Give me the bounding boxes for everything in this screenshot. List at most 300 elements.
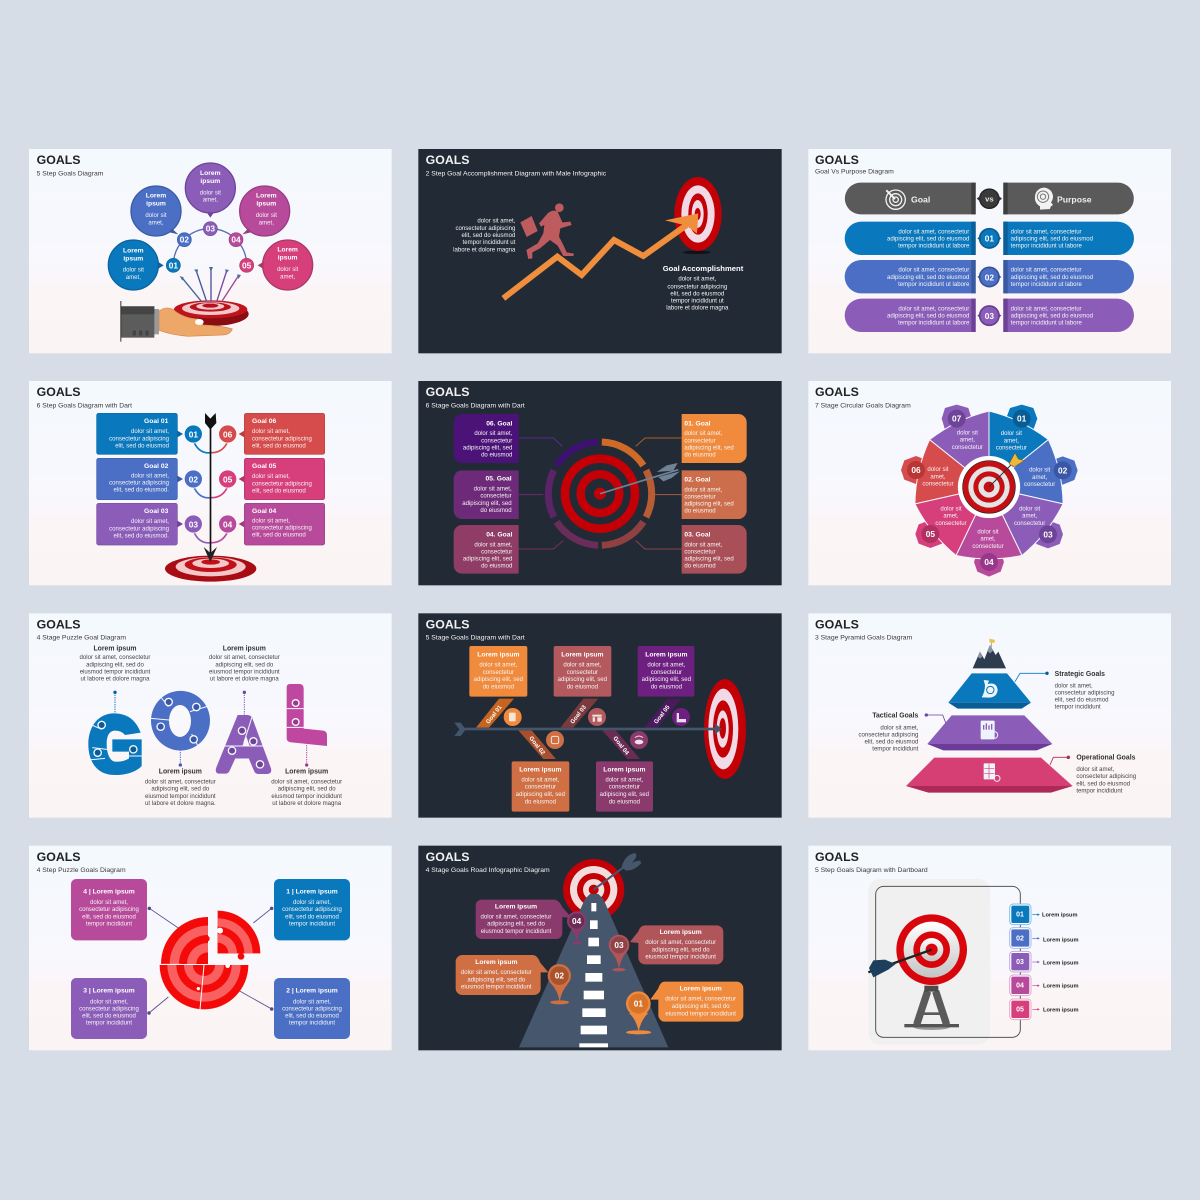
panel background xyxy=(29,149,392,353)
text block 4: eiusmod tempor incididunt xyxy=(271,794,342,800)
goal 05 box: 05. Goal xyxy=(486,476,512,483)
text block 1: dolor sit amet, consectetur xyxy=(80,655,150,661)
wedge text: consectetur xyxy=(1014,521,1045,527)
wedge text: amet, xyxy=(960,438,975,444)
goal 02 box: 02. Goal xyxy=(684,477,711,484)
text block 1: ut labore et dolore magna xyxy=(81,677,150,683)
goal 01 box: do eiusmod xyxy=(684,453,716,459)
panel background xyxy=(808,613,1171,818)
box 2: 2 | Lorem ipsum xyxy=(286,987,338,994)
center target xyxy=(958,453,1024,518)
box: goal 03: dolor sit amet, xyxy=(563,663,602,669)
box: goal 03: Lorem ipsum xyxy=(561,652,603,659)
goal 02 box: elit, sed do eiusmod. xyxy=(114,488,169,494)
item 01 xyxy=(1010,904,1078,925)
goal 02 box: Goal 02 xyxy=(144,463,169,470)
item 04 xyxy=(1010,975,1079,996)
panel: 3 stage pyramid xyxy=(808,613,1171,818)
text: tactical goals xyxy=(858,713,919,753)
bubble 02: dolor sit xyxy=(145,213,167,219)
item 05: Lorem ipsum xyxy=(1043,1008,1079,1014)
text block 2: dolor sit amet, consectetur xyxy=(209,655,280,661)
goal 05 box: elit, sed do eiusmod xyxy=(252,488,306,494)
text: operational goals xyxy=(1076,755,1136,794)
heading xyxy=(815,618,913,642)
goal 01 box xyxy=(682,414,747,463)
box 3: tempor incididunt xyxy=(86,1021,132,1027)
row 03: dolor sit amet, consectetur xyxy=(898,306,969,312)
right text block: labore et dolore magna xyxy=(666,306,729,312)
goal 06 box: adipiscing elit, sed xyxy=(463,445,512,451)
left text block: elit, sed do eiusmod xyxy=(462,233,515,239)
dart xyxy=(868,950,932,977)
goal 03 box: Goal 03 xyxy=(144,508,169,515)
panel background xyxy=(418,149,782,353)
box: goal 02: consectetur xyxy=(525,785,556,791)
goal 06 box: 06. Goal xyxy=(486,421,512,428)
bubble 01: Lorem xyxy=(123,248,144,255)
number badges: 04 xyxy=(223,519,233,529)
goal 04 box: dolor sit amet, xyxy=(252,518,290,524)
text block 3: Lorem ipsum xyxy=(159,769,202,776)
panel background xyxy=(808,149,1171,353)
goal 05 box: dolor sit amet, xyxy=(252,474,290,480)
box: goal 05 xyxy=(638,646,694,697)
row 03 xyxy=(845,299,1134,332)
goal 02 box xyxy=(682,470,747,519)
connector lines xyxy=(925,672,1070,765)
box: goal 03: do eiusmod xyxy=(567,684,598,690)
box 2: elit, sed do eiusmod xyxy=(285,1014,339,1020)
icon: goal target xyxy=(886,190,905,209)
number badges: 05 xyxy=(926,529,935,539)
box: goal 03: adipiscing elit, sed xyxy=(558,677,607,683)
goal 04 box: Goal 04 xyxy=(252,508,277,515)
goal 01 box: dolor sit amet, xyxy=(684,431,723,437)
heading: GOALS xyxy=(426,618,470,632)
goal 06 box xyxy=(239,413,325,454)
connector lines xyxy=(519,438,682,549)
goal 04 box: adipiscing elit, sed xyxy=(463,557,512,563)
dart xyxy=(594,853,641,890)
text block 3: ut labore et dolore magna. xyxy=(145,801,216,807)
item 01: Lorem ipsum xyxy=(1042,913,1078,919)
left text block xyxy=(453,219,516,254)
heading: GOALS xyxy=(815,153,859,167)
item 04: Lorem ipsum xyxy=(1043,984,1079,990)
text: strategic goals: tempor incididunt xyxy=(1055,705,1101,711)
curved links xyxy=(194,443,227,543)
box: goal 02: do eiusmod xyxy=(525,799,556,805)
mountain with flag xyxy=(973,639,1006,668)
goal 06 box: elit, sed do eiusmod xyxy=(252,444,306,450)
item 05 xyxy=(1010,999,1079,1020)
row 01: tempor incididunt ut labore xyxy=(1011,244,1083,250)
callout 03: eiusmod tempor incididunt xyxy=(645,955,716,961)
right text block xyxy=(663,264,744,312)
goal 04 box xyxy=(239,503,325,545)
goal 05 box: consectetur xyxy=(480,494,512,500)
callout 04: dolor sit amet, consectetur xyxy=(481,914,551,920)
box: goal 02: dolor sit amet, xyxy=(521,777,560,783)
wedge text: amet, xyxy=(1022,514,1038,520)
ribbons: Goal 03 xyxy=(570,704,588,725)
row 03: 03 xyxy=(985,311,994,321)
box: goal 02: adipiscing elit, sed xyxy=(516,792,565,798)
right text block: consectetur adipiscing xyxy=(667,284,727,290)
target xyxy=(896,914,967,985)
soft backdrop xyxy=(868,879,990,1045)
goal 02 box: dolor sit amet, xyxy=(684,487,723,493)
letter G xyxy=(88,713,142,775)
text: strategic goals: Strategic Goals xyxy=(1055,671,1105,678)
goal 05 box: adipiscing elit, sed xyxy=(462,501,512,507)
box 1: consectetur adipiscing xyxy=(282,907,342,913)
heading: 6 Stage Goals Diagram with Dart xyxy=(426,402,525,409)
text block 1: adipiscing elit, sed do xyxy=(86,662,145,668)
bubble 03: Lorem xyxy=(200,170,221,177)
text block 3 xyxy=(145,769,216,807)
text: strategic goals xyxy=(1055,671,1115,711)
callout 03: adipiscing elit, sed do xyxy=(652,947,710,953)
running man silhouette xyxy=(520,203,574,259)
goal 06 box: do eiusmod xyxy=(481,453,512,459)
bubble 04: dolor sit xyxy=(256,213,277,219)
panel: goal vs purpose xyxy=(808,149,1171,353)
wedge text: dolor sit xyxy=(977,529,999,535)
panel: 5 step dartboard xyxy=(808,846,1171,1050)
callout 02: dolor sit amet, consectetur xyxy=(461,970,532,976)
heading: 4 Stage Goals Road Infographic Diagram xyxy=(426,867,550,874)
goal 05 box: consectetur adipiscing xyxy=(252,481,312,487)
heading: GOALS xyxy=(37,850,81,864)
row 02: tempor incididunt ut labore xyxy=(1011,282,1083,288)
outline frame xyxy=(876,886,1020,1037)
row 02: dolor sit amet, consectetur xyxy=(898,268,969,274)
goal 01 box: 01. Goal xyxy=(684,421,711,428)
callout 03: dolor sit amet, consectetur xyxy=(645,940,716,946)
wedge text xyxy=(922,430,1055,550)
heading xyxy=(426,385,525,409)
goal 01 box: consectetur adipiscing xyxy=(109,436,169,442)
box: goal 05: dolor sit amet, xyxy=(647,663,686,669)
bubble 02: ipsum xyxy=(146,201,166,208)
text block 3: dolor sit amet, consectetur xyxy=(145,779,216,785)
row 01: dolor sit amet, consectetur xyxy=(898,229,969,235)
row 02: adipiscing elit, sed do eiusmod xyxy=(887,275,969,281)
box: goal 01: adipiscing elit, sed xyxy=(474,677,523,683)
goal 03 box xyxy=(682,525,747,574)
tier: operational xyxy=(906,758,1073,793)
panel: 4 stage road xyxy=(418,846,782,1050)
number badges: 04 xyxy=(984,557,994,567)
row 03: tempor incididunt ut labore xyxy=(898,321,970,327)
number badges xyxy=(184,425,237,533)
road xyxy=(519,894,668,1047)
target xyxy=(704,679,746,779)
number badges: 02 xyxy=(189,474,198,484)
row 02: dolor sit amet, consectetur xyxy=(1011,268,1082,274)
heading: 5 Stage Goals Diagram with Dart xyxy=(426,635,525,642)
goal 04 box: dolor sit amet, xyxy=(474,542,513,548)
text: strategic goals: elit, sed do eiusmod xyxy=(1055,697,1108,703)
bubble 05 xyxy=(258,240,313,290)
bubble 01: dolor sit xyxy=(123,268,144,274)
text block 2: Lorem ipsum xyxy=(223,646,266,653)
box: goal 01: do eiusmod xyxy=(483,684,514,690)
heading: 4 Stage Puzzle Goal Diagram xyxy=(37,635,126,642)
dart xyxy=(600,463,680,494)
goal 06 box: Goal 06 xyxy=(252,418,277,425)
number badges: 01 xyxy=(1017,414,1027,424)
row 02: adipiscing elit, sed do eiusmod xyxy=(1011,275,1093,281)
text: tactical goals: elit, sed do eiusmod xyxy=(865,739,918,745)
heading xyxy=(37,618,126,642)
box 1: elit, sed do eiusmod xyxy=(285,914,339,920)
box 2: consectetur adipiscing xyxy=(282,1006,342,1012)
panel background xyxy=(808,846,1171,1050)
panel: 7 stage circular xyxy=(808,381,1171,585)
item 03: 03 xyxy=(1016,959,1024,966)
callout 04 xyxy=(476,900,572,939)
box: goal 04: adipiscing elit, sed xyxy=(600,792,649,798)
left text block: dolor sit amet, xyxy=(477,219,516,225)
row 02: tempor incididunt ut labore xyxy=(898,282,970,288)
callout 04: eiusmod tempor incididunt xyxy=(481,929,552,935)
panel: 2 step goal accomplishment xyxy=(418,149,782,353)
puzzle piece: upper left xyxy=(161,917,208,964)
heading: GOALS xyxy=(426,850,470,864)
text block 2: ut labore et dolore magna xyxy=(210,677,279,683)
box: goal 01: dolor sit amet, xyxy=(479,663,518,669)
panel background xyxy=(418,381,782,585)
box: goal 03: consectetur xyxy=(567,670,598,676)
goal 02 box: dolor sit amet, xyxy=(131,473,169,479)
wedge text: amet, xyxy=(980,537,996,543)
row 03: adipiscing elit, sed do eiusmod xyxy=(1011,314,1093,320)
header row: Purpose xyxy=(1057,194,1092,204)
bubble 05: amet, xyxy=(280,274,296,280)
goal 03 box: do eiusmod xyxy=(684,564,716,570)
text: operational goals: consectetur adipiscing xyxy=(1076,774,1136,780)
letter A xyxy=(216,715,271,774)
heading: 4 Step Puzzle Goals Diagram xyxy=(37,867,126,874)
step badges: 04 xyxy=(231,235,241,245)
pin 03: 03 xyxy=(614,940,624,950)
number badges: 06 xyxy=(911,465,921,475)
text: operational goals: elit, sed do eiusmod xyxy=(1076,781,1130,787)
row 01: 01 xyxy=(985,234,994,244)
icons xyxy=(981,680,1000,781)
text block 4: adipiscing elit, sed do xyxy=(278,787,336,793)
text: strategic goals: consectetur adipiscing xyxy=(1055,690,1115,696)
callout 02: Lorem ipsum xyxy=(475,959,517,966)
box 3: 3 | Lorem ipsum xyxy=(83,987,135,994)
heading xyxy=(426,153,607,177)
left text block: consectetur adipiscing xyxy=(455,226,515,232)
box 1: dolor sit amet, xyxy=(293,900,331,906)
wedge text: amet, xyxy=(930,474,946,480)
wedge text: amet, xyxy=(1004,438,1019,444)
goal 03 box: consectetur xyxy=(684,549,716,555)
icon circles xyxy=(504,708,690,749)
number badges: 03 xyxy=(189,519,198,529)
header row: Goal xyxy=(911,194,930,204)
bubble 01: amet, xyxy=(126,275,141,281)
text block 4: dolor sit amet, consectetur xyxy=(271,779,342,785)
text: operational goals: dolor sit amet, xyxy=(1076,767,1115,773)
wedge text: dolor sit xyxy=(1019,506,1041,512)
goal 01 box xyxy=(97,413,183,454)
icon: head with target xyxy=(1035,188,1053,210)
item 04: 04 xyxy=(1016,983,1024,990)
goal 06 box: consectetur xyxy=(481,438,512,444)
connector lines xyxy=(148,907,273,1014)
goal 03 box: dolor sit amet, xyxy=(684,542,723,548)
box: goal 01 xyxy=(469,646,527,697)
right text block: Goal Accomplishment xyxy=(663,264,744,273)
box 1: tempor incididunt xyxy=(289,921,335,927)
target rings xyxy=(565,459,635,529)
goal 03 box: 03. Goal xyxy=(684,531,711,538)
text block 4: Lorem ipsum xyxy=(285,769,328,776)
box: goal 05: adipiscing elit, sed xyxy=(642,677,691,683)
bubble 02: amet, xyxy=(148,220,164,226)
dart arrow xyxy=(204,413,217,562)
left text block: labore et dolore magna xyxy=(453,248,516,254)
goal 01 box: elit, sed do eiusmod xyxy=(115,444,169,450)
row 03: adipiscing elit, sed do eiusmod xyxy=(887,314,969,320)
badges: hexagons xyxy=(901,405,1078,577)
pin 04 xyxy=(567,911,586,944)
goal 03 box: consectetur adipiscing xyxy=(109,526,169,532)
ribbons: Goal 02 xyxy=(527,736,546,757)
goal 02 box: do eiusmod xyxy=(684,509,716,515)
heading: 7 Stage Circular Goals Diagram xyxy=(815,402,911,409)
item 02: 02 xyxy=(1016,935,1024,942)
wedge text: dolor sit xyxy=(1029,468,1051,474)
box: goal 02 xyxy=(512,761,569,812)
box 4: consectetur adipiscing xyxy=(79,907,139,913)
box: goal 05: do eiusmod xyxy=(651,684,682,690)
panel background xyxy=(418,846,782,1050)
item 01: 01 xyxy=(1016,912,1024,919)
step badges: 02 xyxy=(180,235,189,245)
puzzle pieces: lower xyxy=(160,965,248,1009)
heading: GOALS xyxy=(426,153,470,167)
box 3 xyxy=(71,978,147,1039)
box 4: elit, sed do eiusmod xyxy=(82,914,136,920)
goal 06 box: dolor sit amet, xyxy=(474,431,513,437)
text block 1: eiusmod tempor incididunt xyxy=(80,669,151,675)
callout 03 xyxy=(630,925,723,964)
box 3: dolor sit amet, xyxy=(90,999,128,1005)
tier: strategic xyxy=(948,673,1031,709)
box: goal 01: Lorem ipsum xyxy=(477,652,519,659)
panel background xyxy=(808,381,1171,585)
goal 02 box: consectetur adipiscing xyxy=(109,481,169,487)
text: tactical goals: tempor incididunt xyxy=(872,747,919,753)
bubble 04 xyxy=(240,186,290,236)
bubble 03: amet, xyxy=(203,198,218,204)
dotted connectors xyxy=(113,691,308,767)
heading: GOALS xyxy=(815,850,859,864)
goal 04 box: 04. Goal xyxy=(486,531,512,538)
row 01: adipiscing elit, sed do eiusmod xyxy=(1011,237,1093,243)
box 2 xyxy=(274,978,350,1039)
target on hand xyxy=(173,300,249,326)
wedge text: dolor sit xyxy=(957,430,978,436)
target xyxy=(674,177,722,254)
goal 04 box: do eiusmod xyxy=(481,564,512,570)
bubble 04: Lorem xyxy=(256,193,277,200)
ribbons xyxy=(476,699,682,759)
bubble 01 xyxy=(108,240,164,290)
bubble 03 xyxy=(185,163,235,218)
text block 3: adipiscing elit, sed do xyxy=(151,787,210,793)
pin 04: 04 xyxy=(572,916,582,926)
letter L xyxy=(287,684,327,746)
row 01 xyxy=(845,222,1134,255)
panel background xyxy=(29,613,392,818)
goal 06 box: consectetur adipiscing xyxy=(252,436,312,442)
right text block: tempor incididunt ut xyxy=(671,298,724,304)
panel: 6 step goals with dart xyxy=(29,381,392,585)
panel background xyxy=(418,613,782,818)
heading: GOALS xyxy=(426,385,470,399)
callout 02: adipiscing elit, sed do xyxy=(467,977,526,983)
text block 4: ut labore et dolore magna xyxy=(272,801,342,807)
bubble 02 xyxy=(131,186,181,236)
letter O xyxy=(151,691,210,750)
box 3: consectetur adipiscing xyxy=(79,1006,139,1012)
box 2: tempor incididunt xyxy=(289,1021,335,1027)
row 01: dolor sit amet, consectetur xyxy=(1011,229,1082,235)
box: goal 04 xyxy=(596,761,653,812)
box 4: tempor incididunt xyxy=(86,921,132,927)
box: goal 04: dolor sit amet, xyxy=(605,777,644,783)
box: goal 01: consectetur xyxy=(483,670,514,676)
box 2: dolor sit amet, xyxy=(293,999,331,1005)
text block 4 xyxy=(271,769,342,807)
panel: 5 stage goals with dart xyxy=(418,613,782,818)
heading: Goal Vs Purpose Diagram xyxy=(815,169,894,176)
text: strategic goals: dolor sit amet, xyxy=(1055,683,1093,689)
callout 01 xyxy=(650,982,743,1022)
arrows xyxy=(180,267,241,302)
text block 3: eiusmod tempor incididunt xyxy=(145,794,216,800)
callout 04: Lorem ipsum xyxy=(495,904,537,911)
text: tactical goals: Tactical Goals xyxy=(872,713,919,720)
pin 02: 02 xyxy=(555,971,564,981)
wedge text: amet, xyxy=(943,514,959,520)
heading xyxy=(815,153,894,176)
text: operational goals: Operational Goals xyxy=(1076,755,1136,762)
bubble 01: ipsum xyxy=(123,256,143,263)
callout 03: Lorem ipsum xyxy=(660,929,702,936)
header row: vs xyxy=(985,195,994,204)
box: goal 02: Lorem ipsum xyxy=(519,767,561,774)
pin 01 xyxy=(626,991,651,1034)
item 05: 05 xyxy=(1016,1007,1024,1014)
goal 02 box xyxy=(97,458,183,500)
callout 01: Lorem ipsum xyxy=(680,986,722,993)
goal 05 box xyxy=(239,458,325,500)
callout 02: eiusmod tempor incididunt xyxy=(461,985,532,991)
text block 1 xyxy=(80,646,151,683)
wedges xyxy=(915,411,1063,559)
heading: 2 Step Goal Accomplishment Diagram with Male Infographic xyxy=(426,170,607,177)
